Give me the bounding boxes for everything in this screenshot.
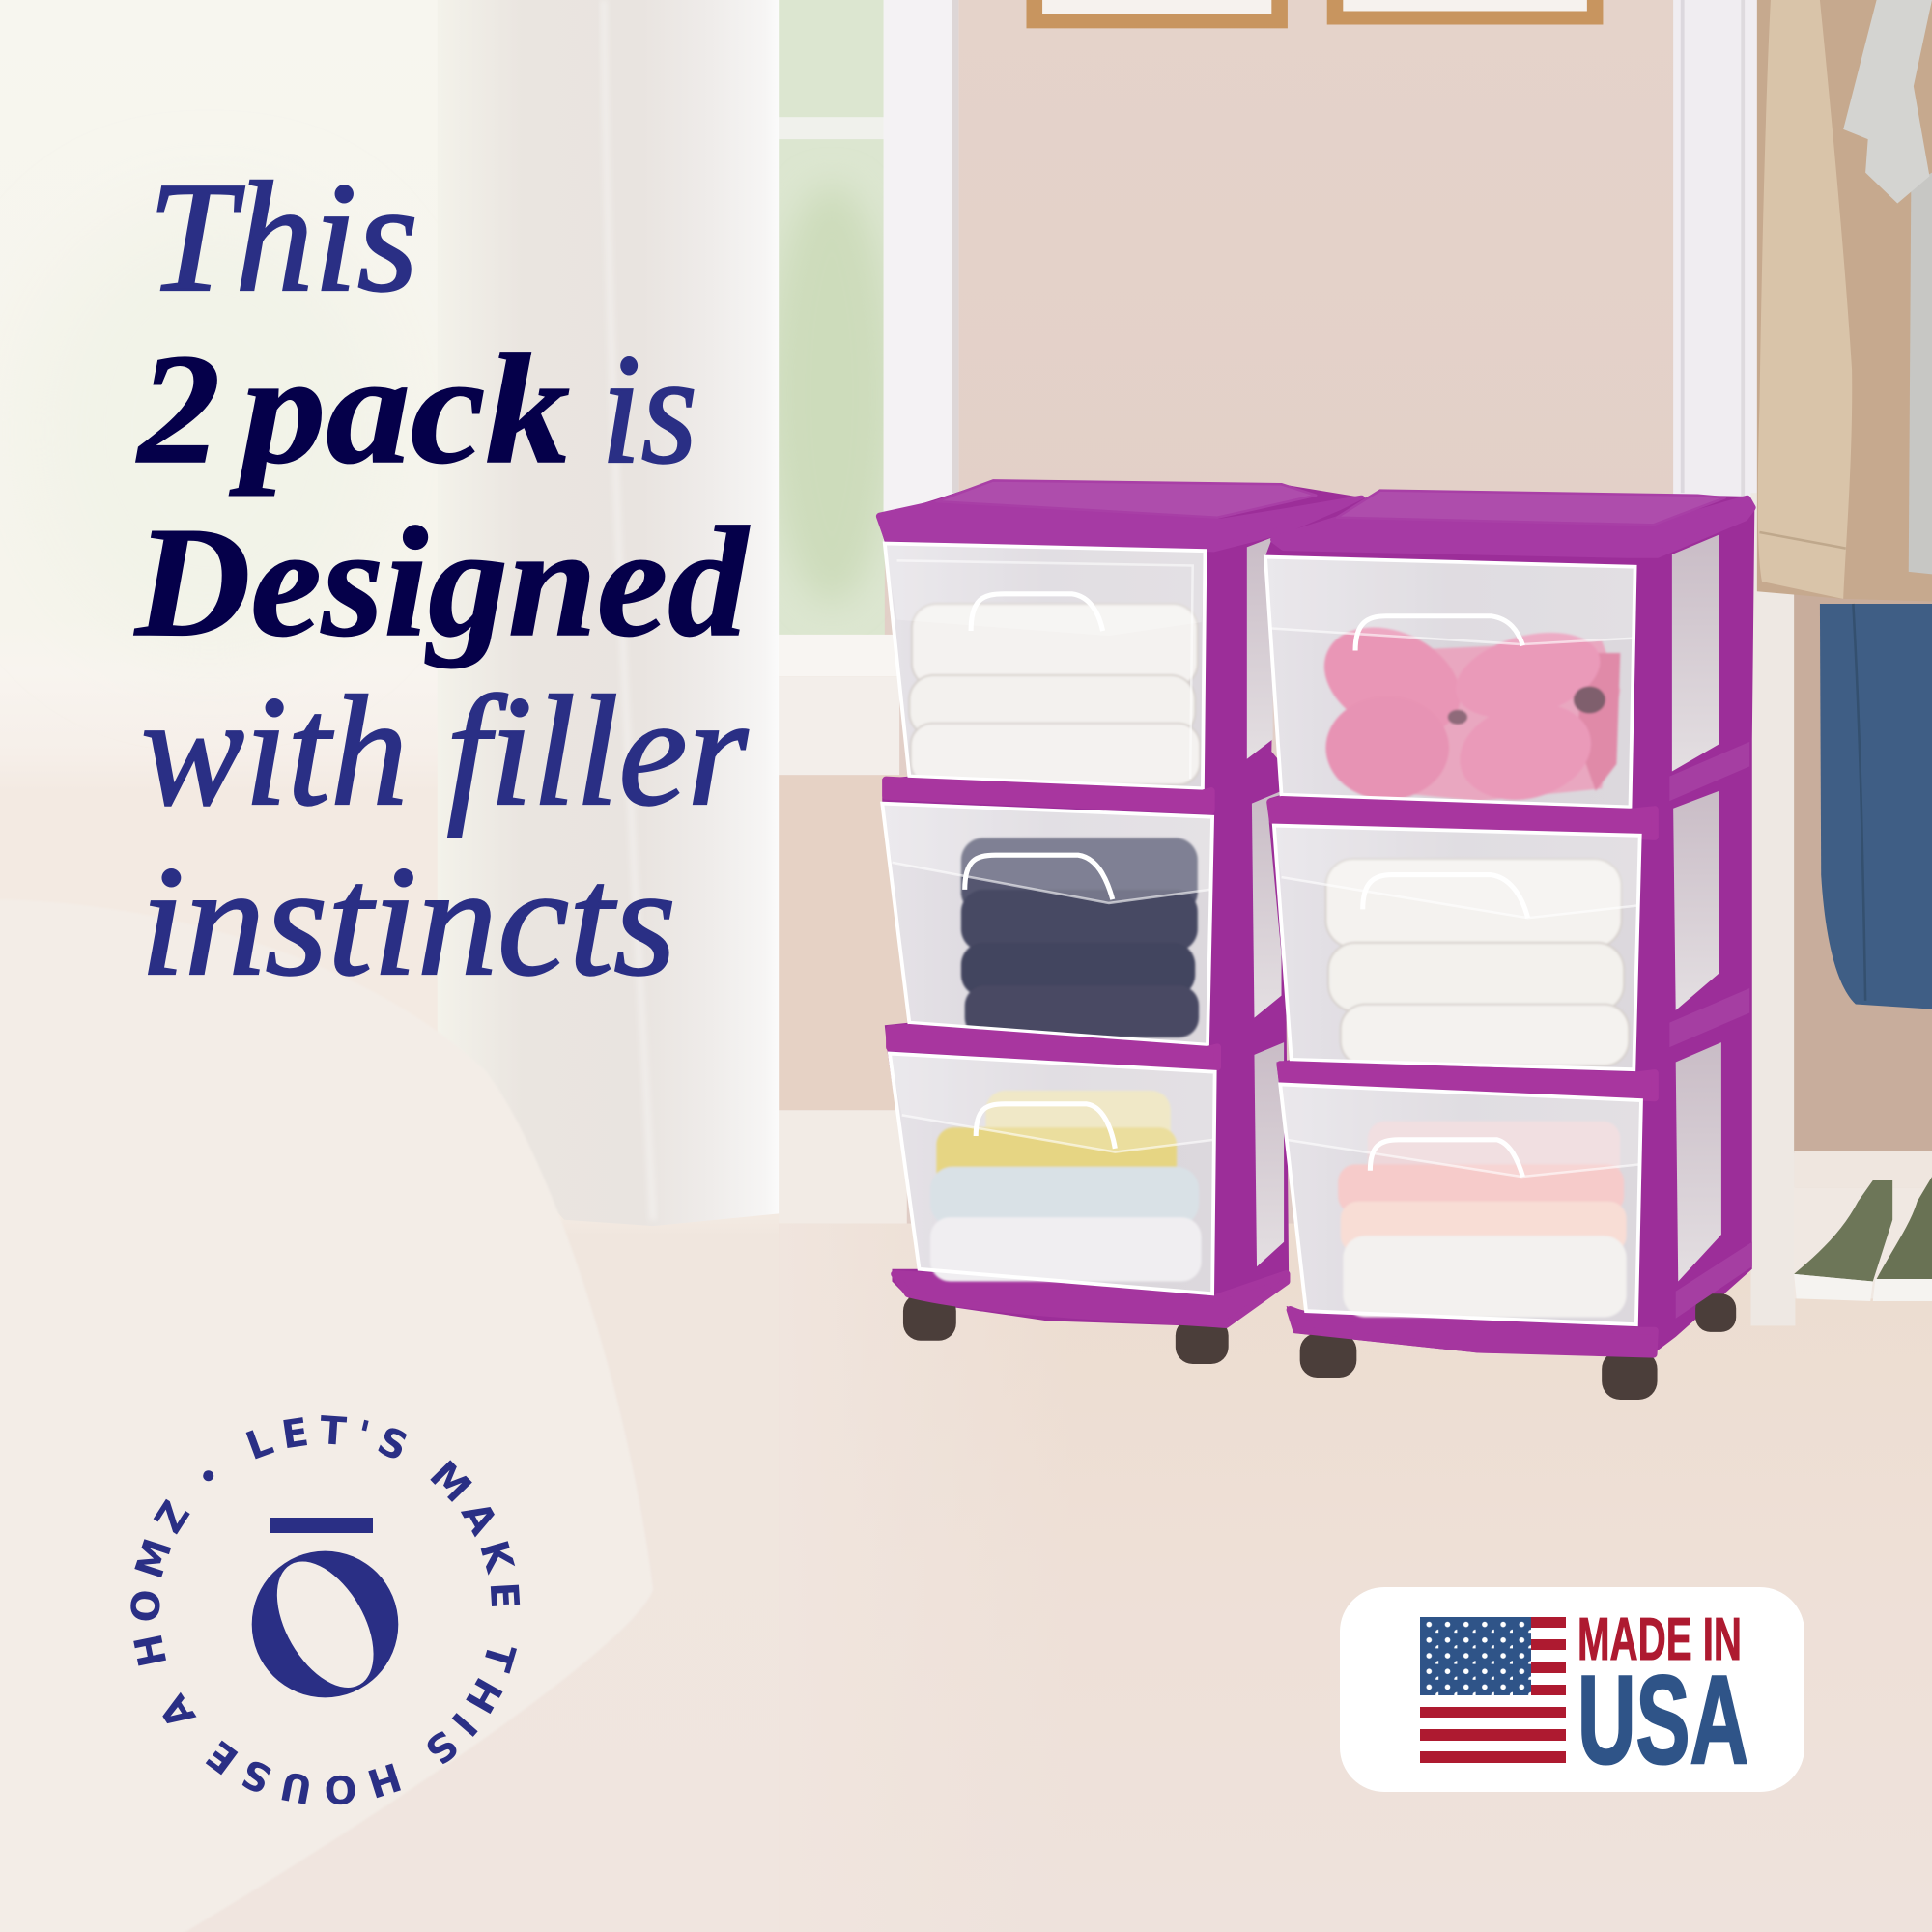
line: is: is — [601, 323, 697, 497]
drawer 3 with peach and white clothes — [1280, 1084, 1641, 1324]
rail 1 — [886, 780, 1211, 810]
drawer 1 with towels — [885, 543, 1205, 788]
picture frames — [1026, 0, 1603, 28]
sheer curtain — [438, 0, 779, 1226]
bed — [0, 899, 653, 1932]
closet door trim — [1673, 0, 1795, 1325]
drawer unit: right — [1264, 491, 1754, 1400]
headline — [133, 151, 751, 1009]
wall and baseboard under window — [771, 775, 907, 1226]
lid — [880, 480, 1361, 549]
shoes — [1794, 1180, 1892, 1282]
usa flag icon — [1420, 1617, 1566, 1763]
sleeve cuff — [1759, 532, 1846, 549]
line: instincts: instincts — [140, 835, 676, 1009]
left washed overlay — [0, 0, 779, 1932]
window with garden view — [770, 0, 958, 775]
logo bar — [270, 1518, 373, 1533]
bottom rail — [895, 1274, 1287, 1324]
badge text: made in: MADE IN — [1577, 1606, 1742, 1673]
drawer 2 with dark folded clothes — [882, 804, 1212, 1045]
slogan dot — [203, 1470, 213, 1481]
floor wash fade — [779, 1224, 1074, 1932]
circular brand logo — [130, 1415, 520, 1804]
made in usa badge — [1340, 1587, 1804, 1792]
grey tee fold — [1843, 0, 1932, 203]
rail 2 — [890, 1028, 1217, 1067]
lid — [1274, 491, 1752, 554]
rail 1 — [1270, 800, 1655, 837]
tan shirt — [1757, 0, 1932, 601]
side shelves — [1669, 742, 1752, 1319]
tan sleeve — [1758, 0, 1852, 599]
side panels — [1672, 535, 1721, 1282]
circular slogan: LET'S MAKE THIS HOUSE A HOMZ — [130, 1415, 520, 1804]
carpet floor — [0, 1224, 1932, 1932]
line: This: This — [148, 151, 418, 325]
line: Designed: Designed — [133, 496, 751, 669]
logo o mark — [252, 1551, 398, 1697]
badge background — [1340, 1587, 1804, 1792]
line: pack: pack — [229, 323, 570, 497]
line: 2: 2 — [136, 323, 220, 497]
drawer unit: left — [877, 480, 1364, 1364]
bottom rail — [1290, 1310, 1655, 1354]
side panels — [1247, 537, 1284, 1266]
grey tee — [1909, 173, 1932, 574]
rail 2 — [1280, 1065, 1655, 1097]
drawer 2 with white towels — [1274, 826, 1640, 1069]
wheels — [903, 1293, 1229, 1364]
wheels — [1300, 1293, 1736, 1400]
jeans — [1820, 604, 1932, 1009]
drawer 1 with pink items — [1265, 557, 1635, 813]
drawer 3 with yellow, blue and white clothes — [890, 1054, 1215, 1293]
closet interior with clothes — [1757, 0, 1932, 1301]
line: with filler: with filler — [141, 665, 749, 838]
badge text: usa: USA — [1577, 1649, 1748, 1790]
